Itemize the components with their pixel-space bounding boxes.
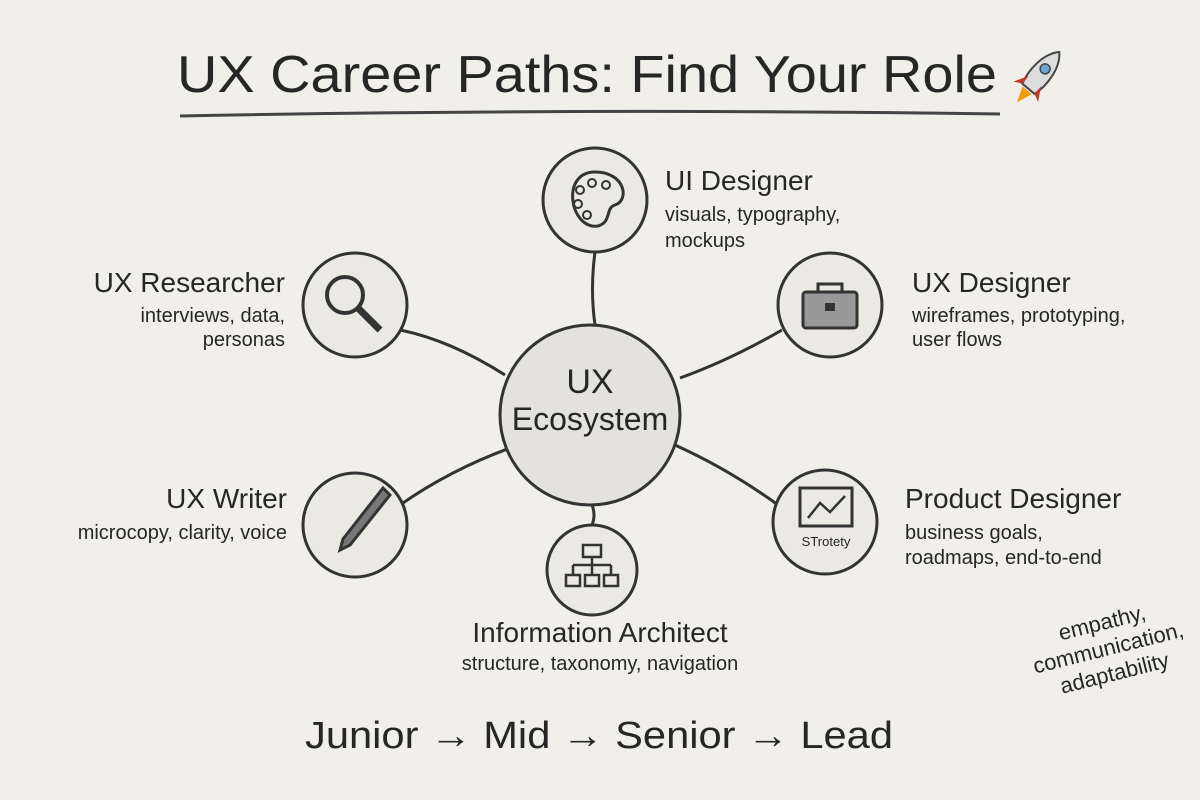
node: UX Writer: UX Writer [166,483,287,514]
center circle: UX Ecosystem [500,325,680,505]
icon: chart window [800,488,852,549]
node: UX Writer [78,473,407,577]
career ladder: Junior → Mid → Senior → Lead [305,715,893,757]
node: UX Researcher: interviews, data, [140,305,285,327]
node: Product Designer [773,470,1121,574]
node: UX Writer: microcopy, clarity, voice [78,522,287,544]
node: UX Designer [778,253,1125,357]
node: Product Designer: business goals, [905,522,1043,544]
node: UX Designer: UX Designer [912,267,1071,298]
node: UI Designer: UI Designer [665,165,813,196]
node: Information Architect: Information Architect [472,617,728,648]
node: UX Researcher: personas [203,329,285,351]
soft skills note: communication, [1030,617,1186,678]
node: UX Researcher: UX Researcher [94,267,285,298]
title underline [180,111,1000,116]
node: UI Designer [543,148,840,252]
connectors [400,252,782,525]
title: UX Career Paths: Find Your Role [177,46,997,104]
center circle: UX Ecosystem: UX [566,363,614,401]
icon: palette [573,172,623,226]
icon: rocket [1005,42,1072,113]
icon: pen [340,488,390,550]
node: UI Designer: mockups [665,230,745,252]
node: Product Designer: Product Designer [905,483,1121,514]
node: Information Architect: structure, taxonomy, navigation [462,653,738,675]
node: Information Architect [462,525,738,675]
icon: chart window: STrotety [802,534,851,549]
soft skills note [1024,592,1192,704]
icon: magnifier [327,277,380,330]
node: UX Researcher [94,253,407,357]
node: UI Designer: visuals, typography, [665,204,840,226]
icon: sitemap [566,545,618,586]
center circle: UX Ecosystem: Ecosystem [512,401,668,437]
soft skills note: adaptability [1057,647,1172,699]
title [177,42,1072,113]
node: UX Designer: wireframes, prototyping, [911,305,1125,327]
icon: briefcase [803,284,857,328]
node: UX Designer: user flows [912,329,1002,351]
node: Product Designer: roadmaps, end-to-end [905,547,1102,569]
soft skills note: empathy, [1056,600,1148,645]
